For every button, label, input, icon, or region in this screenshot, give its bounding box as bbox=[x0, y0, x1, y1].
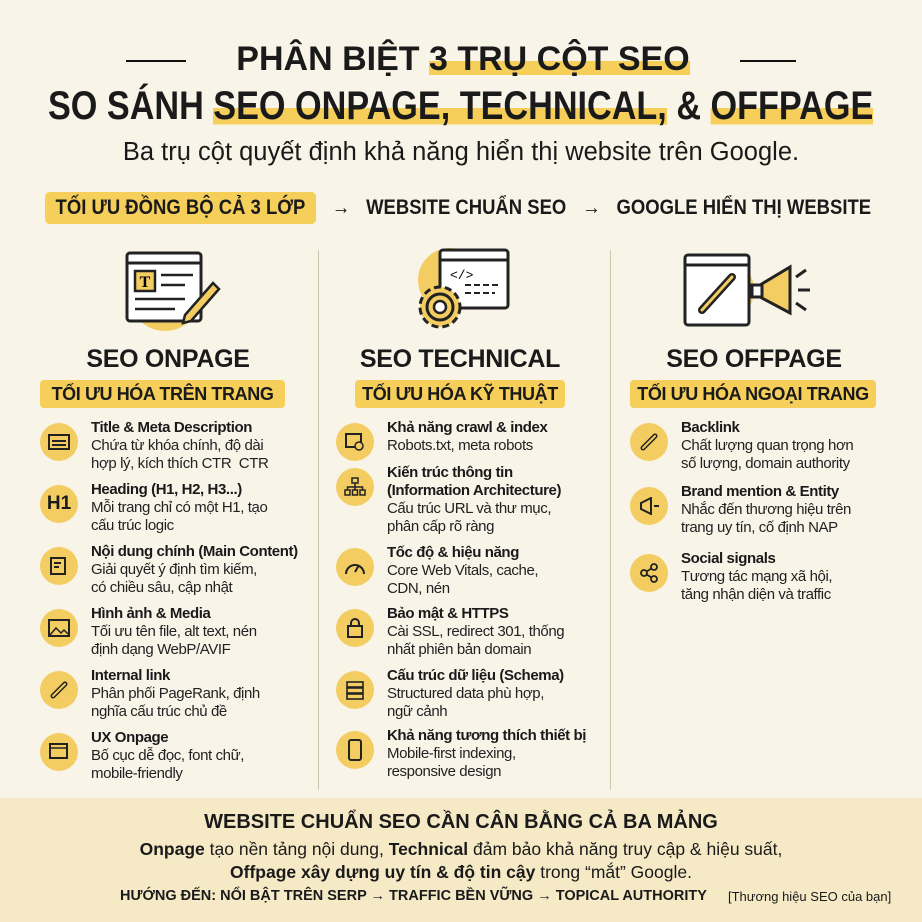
item: images bbox=[40, 605, 257, 658]
pill: onpage: TỐI ƯU HÓA TRÊN TRANG bbox=[52, 384, 273, 404]
summary heading: WEBSITE CHUẨN SEO CẦN CÂN BẰNG CẢ BA MẢNG bbox=[204, 811, 718, 833]
offpage items bbox=[630, 419, 853, 603]
flow row: WEBSITE CHUẨN SEO bbox=[366, 196, 566, 219]
onpage items: Mỗi trang chỉ có một H1, tạo bbox=[91, 499, 267, 516]
goal line: HƯỚNG ĐẾN: NỔI BẬT TRÊN SERP → TRAFFIC BỀN VỮNG → TOPICAL AUTHORITY bbox=[120, 888, 707, 904]
technical items: responsive design bbox=[387, 763, 501, 780]
technical items: Robots.txt, meta robots bbox=[387, 437, 533, 454]
onpage items: Heading (H1, H2, H3...) bbox=[91, 481, 242, 498]
summary text: Offpage xây dựng uy tín & độ tin cậy trong “mắt” Google. bbox=[230, 862, 692, 882]
onpage items bbox=[40, 419, 298, 782]
item: security bbox=[336, 605, 564, 658]
icon: technical gear + code bbox=[418, 248, 510, 328]
offpage items: Backlink bbox=[681, 419, 740, 436]
item: heading bbox=[40, 481, 268, 534]
offpage items: Nhắc đến thương hiệu trên bbox=[681, 501, 851, 518]
brand tag: [Thương hiệu SEO của bạn] bbox=[728, 889, 891, 904]
technical items: ngữ cảnh bbox=[387, 703, 447, 720]
item: mobile bbox=[336, 727, 586, 780]
technical items: Kiến trúc thông tin bbox=[387, 464, 513, 481]
onpage items: Hình ảnh & Media bbox=[91, 605, 210, 622]
flow row: GOOGLE HIỂN THỊ WEBSITE bbox=[616, 196, 871, 219]
subtitle: Ba trụ cột quyết định khả năng hiển thị website trên Google. bbox=[123, 138, 799, 166]
summary text bbox=[140, 839, 782, 882]
offpage items: Social signals bbox=[681, 550, 775, 567]
onpage items: UX Onpage bbox=[91, 729, 168, 746]
title line 2: SO SÁNH SEO ONPAGE, TECHNICAL, & OFFPAGE bbox=[48, 84, 874, 128]
technical items bbox=[336, 419, 586, 780]
item: architecture bbox=[336, 464, 561, 535]
pill: technical bbox=[355, 380, 565, 408]
item: brand mention bbox=[630, 483, 851, 536]
onpage items: Internal link bbox=[91, 667, 170, 684]
icon: offpage chain + megaphone bbox=[684, 254, 810, 326]
pill: technical: TỐI ƯU HÓA KỸ THUẬT bbox=[362, 384, 558, 404]
icon: onpage document: T bbox=[140, 274, 151, 291]
technical items: phân cấp rõ ràng bbox=[387, 518, 494, 535]
item: backlink bbox=[630, 419, 853, 472]
onpage items: Giải quyết ý định tìm kiếm, bbox=[91, 561, 257, 578]
flow row: → bbox=[332, 196, 350, 219]
item: ux bbox=[40, 729, 244, 782]
flow row bbox=[45, 192, 871, 224]
column heading: offpage: SEO OFFPAGE bbox=[666, 345, 842, 373]
technical items: Mobile-first indexing, bbox=[387, 745, 516, 762]
onpage items: Bố cục dễ đọc, font chữ, bbox=[91, 747, 244, 764]
onpage items: Chứa từ khóa chính, độ dài bbox=[91, 437, 263, 454]
summary text: Onpage tạo nền tảng nội dung, Technical đảm bảo khả năng truy cập & hiệu suất, bbox=[140, 839, 782, 859]
technical items: Tốc độ & hiệu năng bbox=[387, 544, 519, 561]
item: social bbox=[630, 550, 832, 603]
onpage items: Title & Meta Description bbox=[91, 419, 252, 436]
item: schema bbox=[336, 667, 564, 720]
onpage items: Nội dung chính (Main Content) bbox=[91, 543, 298, 560]
technical items: nhất phiên bản domain bbox=[387, 641, 531, 658]
flow row: → bbox=[582, 196, 601, 219]
technical items: Cài SSL, redirect 301, thống bbox=[387, 623, 564, 640]
technical items: Bảo mật & HTTPS bbox=[387, 605, 509, 622]
offpage items: trang uy tín, cố định NAP bbox=[681, 519, 838, 536]
technical items: Core Web Vitals, cache, bbox=[387, 562, 538, 579]
bottom summary band bbox=[0, 798, 922, 922]
technical items: CDN, nén bbox=[387, 580, 450, 597]
technical items: Cấu trúc dữ liệu (Schema) bbox=[387, 667, 564, 684]
offpage items: Brand mention & Entity bbox=[681, 483, 839, 500]
item: crawl bbox=[336, 419, 548, 461]
onpage items: nghĩa cấu trúc chủ đề bbox=[91, 703, 227, 720]
pill: onpage bbox=[40, 380, 285, 408]
pill: offpage bbox=[630, 380, 876, 408]
technical items: Khả năng tương thích thiết bị bbox=[387, 727, 586, 744]
item: main content bbox=[40, 543, 298, 596]
technical items: (Information Architecture) bbox=[387, 482, 561, 499]
onpage items: cấu trúc logic bbox=[91, 517, 174, 534]
technical items: Cấu trúc URL và thư mục, bbox=[387, 500, 551, 517]
offpage items: Tương tác mạng xã hội, bbox=[681, 568, 832, 585]
pill: offpage: TỐI ƯU HÓA NGOẠI TRANG bbox=[637, 384, 869, 404]
technical items: Khả năng crawl & index bbox=[387, 419, 547, 436]
title line 1: PHÂN BIỆT 3 TRỤ CỘT SEO bbox=[236, 40, 690, 78]
item: speed bbox=[336, 544, 538, 597]
column heading: technical: SEO TECHNICAL bbox=[360, 345, 560, 373]
column heading: onpage: SEO ONPAGE bbox=[86, 345, 250, 373]
onpage items: Tối ưu tên file, alt text, nén bbox=[91, 623, 257, 640]
offpage items: số lượng, domain authority bbox=[681, 455, 850, 472]
technical items: Structured data phù hợp, bbox=[387, 685, 544, 702]
onpage items: định dạng WebP/AVIF bbox=[91, 641, 230, 658]
offpage items: Chất lượng quan trọng hơn bbox=[681, 437, 853, 454]
onpage items: H1 bbox=[47, 493, 71, 514]
offpage items: tăng nhận diện và traffic bbox=[681, 586, 831, 603]
onpage items: có chiều sâu, cập nhật bbox=[91, 579, 232, 596]
item: internal link bbox=[40, 667, 260, 720]
onpage items: mobile-friendly bbox=[91, 765, 183, 782]
icon: technical gear + code: </> bbox=[450, 268, 474, 283]
flow row: TỐI ƯU ĐỒNG BỘ CẢ 3 LỚP bbox=[56, 196, 305, 219]
item: title meta bbox=[40, 419, 268, 472]
onpage items: hợp lý, kích thích CTR CTR bbox=[91, 455, 268, 472]
icon: onpage document bbox=[126, 252, 221, 331]
onpage items: Phân phối PageRank, định bbox=[91, 685, 260, 702]
